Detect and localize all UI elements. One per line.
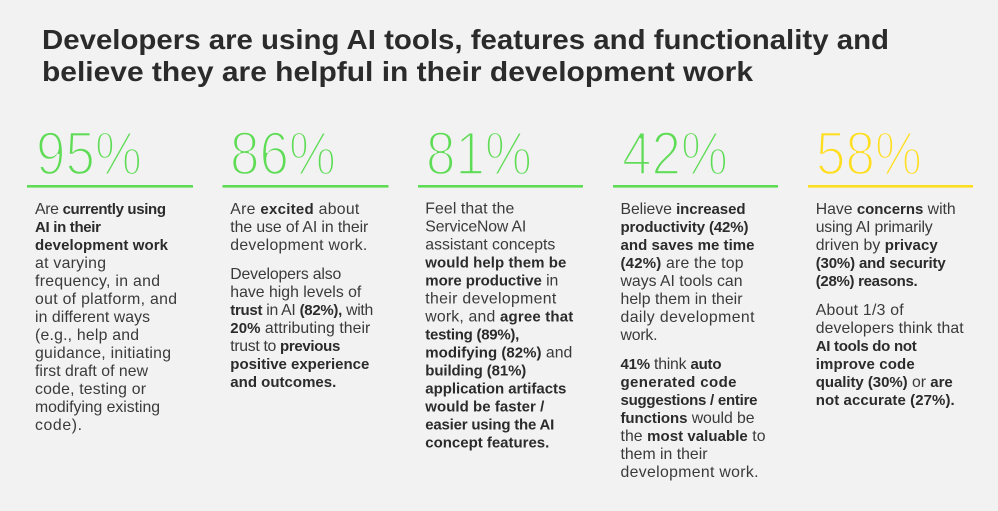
divider rule [808,185,973,188]
text block [35,201,177,434]
panel: 58% concerns [808,120,973,409]
text block: in different ways [35,309,150,326]
text block: at varying [35,255,106,272]
text block: development work. [620,464,758,481]
text block: the use of AI in their [230,219,368,236]
text block: ServiceNow AI [425,218,526,236]
text block: have high levels of [230,284,362,301]
text block: 20% attributing their [230,320,370,337]
text block: (e.g., help and [35,327,139,344]
text block: building (81%) [425,362,526,380]
title [42,24,889,87]
divider rule [27,185,193,188]
text block: concept features. [425,434,549,452]
text block: suggestions / entire [620,392,758,409]
text block [816,201,964,409]
text block: daily development [620,309,755,326]
text block: and outcomes. [230,374,336,391]
text block: AI tools do not [816,338,917,355]
panel: 95% currently using AI [27,120,193,434]
divider rule [613,185,778,188]
text block: help them in their [620,291,742,308]
text block [424,200,573,452]
text block: out of platform, and [35,291,177,308]
text block: ways AI tools can [620,273,742,290]
panel: 81% ServiceNow AI assistant concepts [418,120,583,452]
statistic: 58%: 58% [816,120,922,188]
text block: and saves me time [620,237,754,254]
text block: work, and agree that [424,308,573,326]
panel: 86% excited about AI [222,120,388,391]
text block [230,201,373,391]
text block: frequency, in and [35,273,160,290]
text block: (30%) and security [816,255,946,272]
text block [620,201,766,481]
text block: quality (30%) or are [816,374,953,391]
title: Developers are using AI tools, features and functionality and [42,24,889,55]
text block: Believe increased [620,201,746,218]
text block: their development [425,290,557,308]
text block: would be faster / [424,398,545,416]
text block: (28%) reasons. [816,273,918,290]
text block: productivity (42%) [620,219,748,236]
text block: application artifacts [425,380,566,398]
text block: easier using the AI [425,416,554,434]
text block: would help them be [424,254,566,272]
text block: modifying existing [35,399,160,416]
text block: Are excited about [230,201,360,218]
text block: About 1/3 of [816,302,904,319]
text block: positive experience [230,356,369,373]
statistic: 42%: 42% [622,120,728,188]
text block: more productive in [425,272,558,290]
text block: development work [35,237,169,254]
text block: driven by privacy [816,237,938,254]
text block: modifying (82%) and [425,344,572,362]
text block: Are currently using [35,201,166,218]
text block: the most valuable to [620,428,766,445]
statistic: 95%: 95% [36,120,142,188]
divider rule [418,185,583,188]
text block: AI in their [35,219,101,236]
divider rule [222,185,388,188]
text block: Have concerns with [816,201,956,218]
text block: work. [620,327,658,344]
text block: 41% think auto [620,356,722,373]
text block: code, testing or [35,381,146,398]
text block: guidance, initiating [35,345,171,362]
text block: testing (89%), [425,326,519,344]
text block: assistant concepts [425,236,555,254]
text block: Developers also [230,266,342,283]
text block: code). [35,417,82,434]
text block: first draft of new [35,363,149,380]
statistic: 86%: 86% [230,120,336,188]
text block: them in their [620,446,708,463]
text block: development work. [230,237,367,254]
text block: functions would be [620,410,755,427]
text block: developers think that [816,320,964,337]
statistic: 81%: 81% [426,120,532,188]
text block: using AI primarily [816,219,933,236]
text block: trust in AI (82%), with [230,302,373,319]
text block: improve code [816,356,915,373]
text block: Feel that the [425,200,515,218]
title: believe they are helpful in their development work [42,56,753,87]
text block: not accurate (27%). [816,392,955,409]
text block: (42%) are the top [620,255,744,272]
panel: 42% productivity and time savings [613,120,778,481]
text block: trust to previous [230,338,340,355]
text block: generated code [620,374,736,391]
